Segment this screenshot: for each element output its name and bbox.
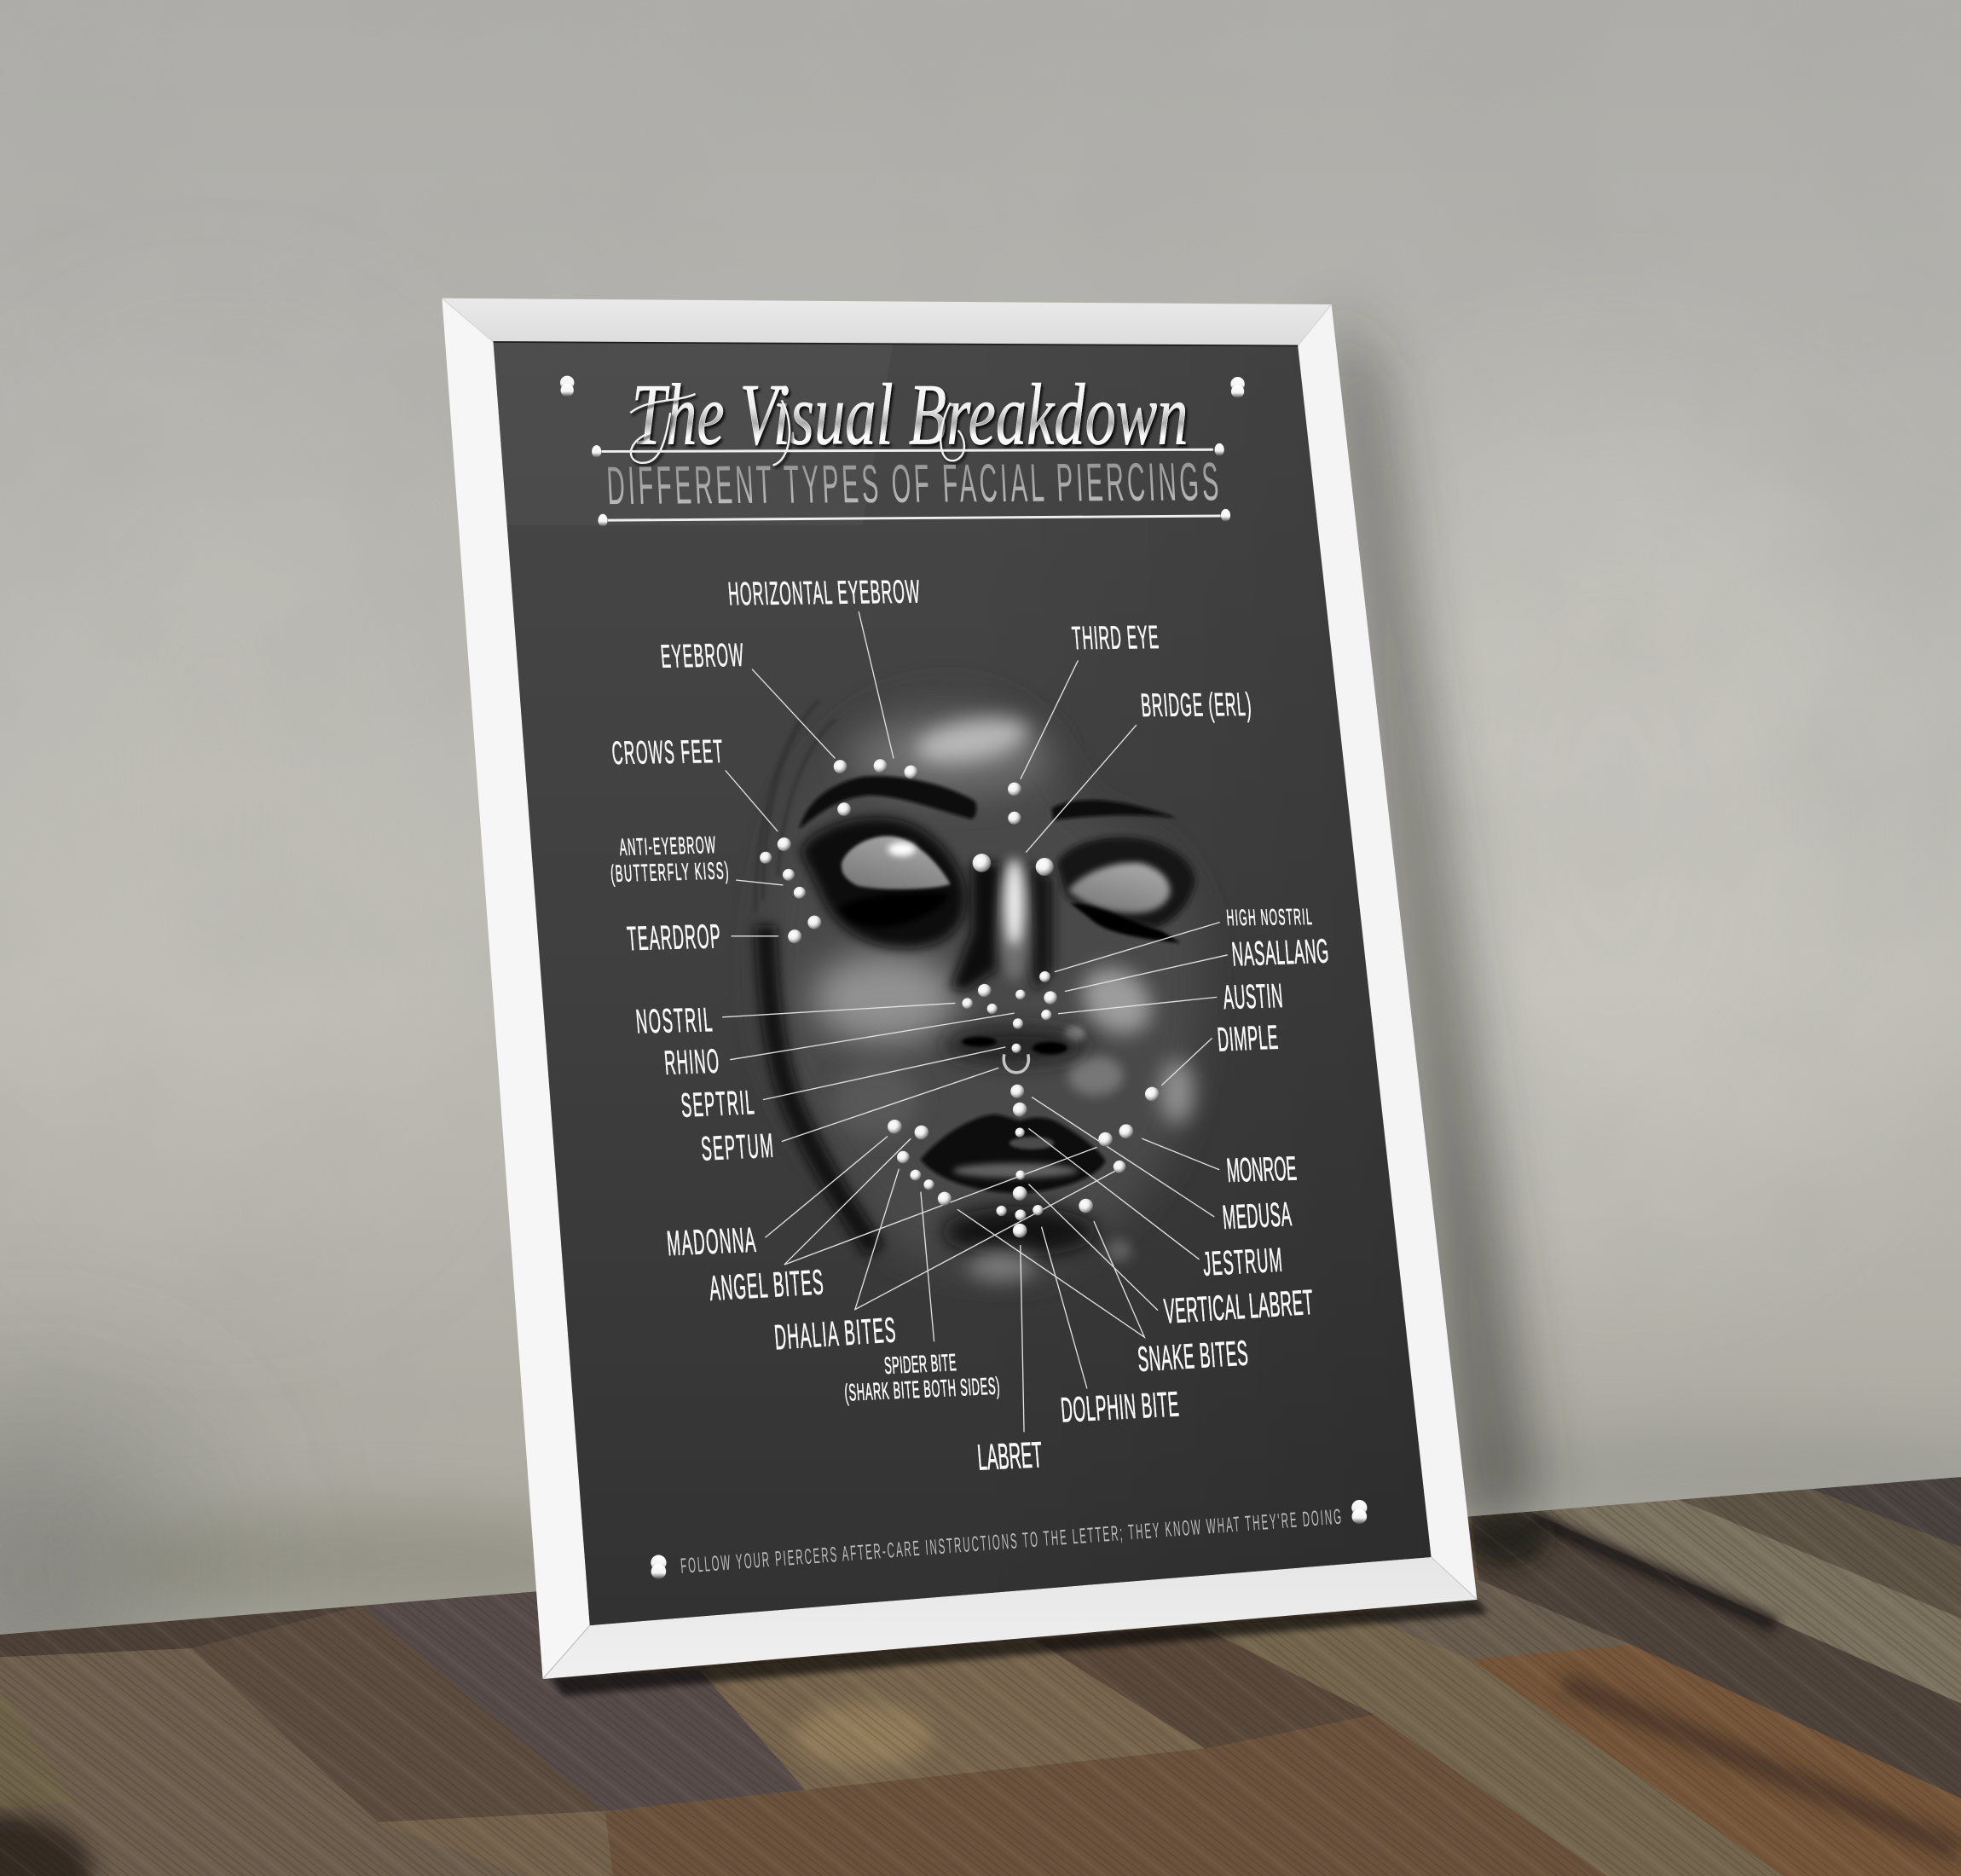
callout: jestrum: JESTRUM [1201,1241,1283,1283]
callout: bridge: BRIDGE (ERL) [1140,687,1252,724]
callout: spider bite: (SHARK BITE BOTH SIDES) [843,1372,1001,1406]
callout: snake bites: SNAKE BITES [1137,1333,1249,1379]
callout: monroe: MONROE [1225,1149,1298,1190]
callout: dolphin bite [1042,1227,1180,1430]
callout: eyebrow [659,637,835,758]
callout: horizontal eyebrow: HORIZONTAL EYEBROW [727,574,921,612]
callout: vertical labret [1028,1184,1315,1331]
callout: spider bite: SPIDER BITE [883,1348,957,1379]
callout: rhino: RHINO [662,1042,720,1082]
callout: dolphin bite: DOLPHIN BITE [1059,1384,1180,1430]
callout: crows feet: CROWS FEET [610,734,724,772]
callout: bridge [1026,687,1252,853]
callout: madonna: MADONNA [665,1220,757,1263]
callout: madonna [665,1136,888,1263]
callout: teardrop: TEARDROP [626,917,722,958]
callout: dhalia bites [772,1169,1115,1357]
callout: labret [976,1245,1044,1479]
callout: third eye [1021,620,1160,779]
callout: monroe [1142,1138,1298,1190]
callout: angel bites: ANGEL BITES [708,1262,824,1308]
callout: anti-eyebrow: ANTI-EYEBROW [618,831,717,860]
callout: anti-eyebrow [610,831,783,887]
subtitle: different types of facial piercings: DIFFERENT TYPES OF FACIAL PIERCINGS [605,453,1220,516]
callout: septum: SEPTUM [700,1126,774,1168]
septum ring [1004,1054,1028,1073]
wood floor [0,1463,1961,1876]
callout: dhalia bites: DHALIA BITES [772,1310,897,1357]
callout: nostril: NOSTRIL [634,1000,714,1040]
callout: medusa: MEDUSA [1221,1195,1293,1236]
subtitle rule with end knobs [598,509,1230,526]
title rule with end knobs [592,443,1224,458]
callout: septril: SEPTRIL [680,1083,755,1125]
callout: jestrum [1028,1128,1283,1283]
callout: anti-eyebrow: (BUTTERFLY KISS) [610,857,730,887]
piercing studs on the face [760,759,1160,1238]
callout: third eye: THIRD EYE [1071,620,1160,657]
callout: spider bite [843,1192,1001,1406]
callout: vertical labret: VERTICAL LABRET [1163,1283,1315,1331]
callout: high nostril [1055,905,1313,972]
corner screws [560,376,1367,1579]
title flourishes [630,394,964,466]
white picture frame [442,298,1477,1679]
callout: austin [1058,976,1284,1016]
callout: dimple: DIMPLE [1216,1018,1280,1059]
callout: rhino [662,1013,1015,1082]
callouts: labels with leader lines [610,574,1330,1479]
callout: horizontal eyebrow [727,574,921,759]
callout: snake bites [957,1209,1249,1379]
callout: nostril [634,1000,955,1040]
frame shadow on wall and floor [550,313,1536,1696]
callout: eyebrow: EYEBROW [659,637,745,675]
callout: high nostril: HIGH NOSTRIL [1225,905,1313,931]
callout: nasallang [1065,932,1330,992]
callout: crows feet [610,734,778,831]
callout: austin: AUSTIN [1222,976,1284,1016]
callout: nasallang: NASALLANG [1230,932,1330,974]
callout: dimple [1161,1018,1280,1086]
callout: septril [680,1047,1005,1125]
callout: septum [700,1068,998,1168]
illustration: painted face in greyscale [755,698,1200,1281]
callout: labret: LABRET [976,1435,1044,1479]
poster board [494,342,1432,1625]
title: The Visual Breakdown: The Visual Breakdown [632,368,1188,464]
callout: medusa [1032,1097,1293,1236]
callout: angel bites [708,1138,1097,1308]
footer: aftercare note: FOLLOW YOUR PIERCERS AFTER-CARE INSTRUCTIONS TO THE LETTER; THEY KNOW WHAT THEY'RE DOING [680,1505,1342,1578]
